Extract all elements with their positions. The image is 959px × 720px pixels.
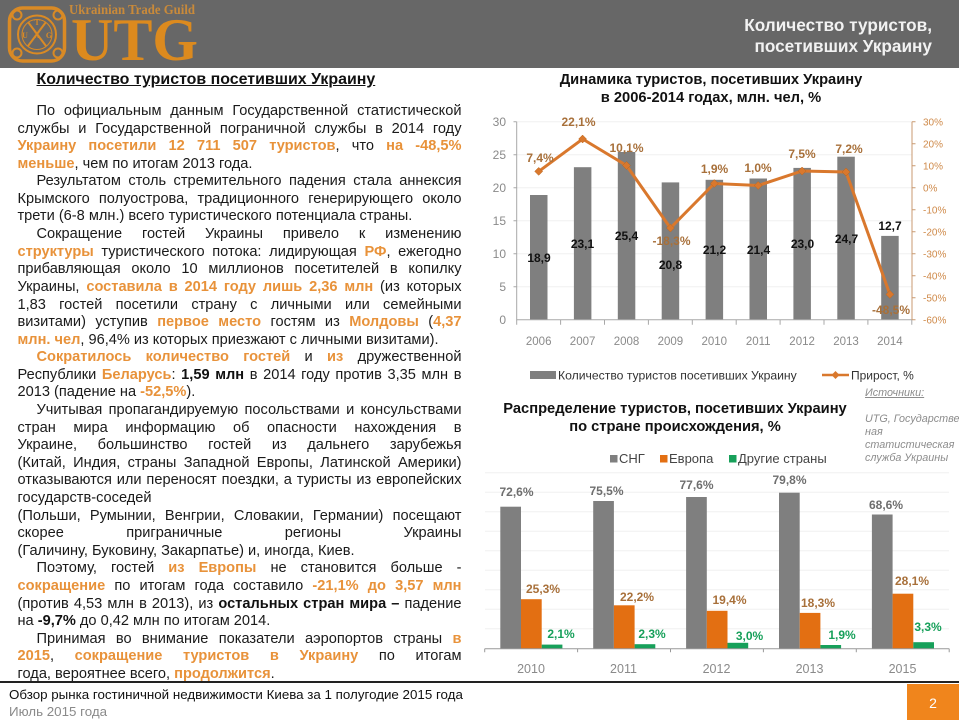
legend: СНГ <box>619 451 645 466</box>
text: службы и Государственной пограничной службы в 2014 году <box>18 120 462 136</box>
bar data labels: 23,0 <box>791 237 815 251</box>
right axis labels: 10% <box>923 162 943 172</box>
text: Учитывая пропагандируемую посольствами и консульствами <box>36 402 462 418</box>
text: отказываются или переносят поездки, а туристы из европейских <box>18 472 462 488</box>
text: меньше, чем по итогам 2013 года. <box>18 156 252 172</box>
header title: Количество туристов, <box>744 15 932 35</box>
header title: посетивших Украину <box>754 36 932 56</box>
line: growth percent <box>535 135 894 298</box>
x axis labels: 2011 <box>746 336 771 348</box>
text: скорее приграничные регионы Украины <box>18 525 462 541</box>
legend: Другие страны <box>738 451 827 466</box>
text: Украине, большинство гостей из дальнего зарубежья <box>18 437 462 453</box>
text block: danger warnings <box>18 402 462 559</box>
text: Украину посетили 12 711 507 туристов, что на -48,5% <box>18 138 462 154</box>
x axis labels: 2009 <box>658 336 683 348</box>
bars: other countries <box>542 642 934 649</box>
text: трети (6-8 млн.) всего туристического потенциала страны. <box>18 208 412 224</box>
x axis labels: 2013 <box>833 336 859 348</box>
text: Сокращение гостей Украины привело к изменению <box>36 226 462 242</box>
growth data labels: -18,3% <box>652 234 691 248</box>
axis <box>485 649 949 652</box>
growth data labels <box>526 115 910 317</box>
chart legend: Количество туристов посетивших Украину <box>558 368 798 382</box>
sources note: ная <box>865 426 883 438</box>
x axis labels: 2014 <box>877 336 903 348</box>
text: структуры туристического потока: лидирующая РФ, ежегодно <box>18 244 462 260</box>
right axis labels: -50% <box>923 294 946 304</box>
header band <box>0 0 959 68</box>
chart 1 title: Динамика туристов, посетивших Украину <box>560 72 862 88</box>
growth data labels: 10,1% <box>609 141 644 155</box>
sources note: служба Украины <box>865 452 948 464</box>
data labels: Europe <box>526 574 929 610</box>
chart 1 title <box>560 72 862 106</box>
data labels: Europe: 25,3% <box>526 582 560 596</box>
right axis labels: 30% <box>923 118 943 128</box>
data labels: other: 2,3% <box>638 627 666 641</box>
text: года, вероятнее всего, продолжится. <box>18 666 275 682</box>
icon: UTG logo: X <box>34 31 40 40</box>
bar data labels: 23,1 <box>571 237 595 251</box>
text: стран мира информацию об опасности нахождения в <box>18 420 462 436</box>
left axis labels: 15 <box>493 214 506 228</box>
x axis labels: 2013 <box>796 662 823 676</box>
text: на -9,7% до 0,42 млн по итогам 2014. <box>18 613 270 629</box>
footer text: Обзор рынка гостиничной недвижимости Киева за 1 полугодие 2015 года <box>9 687 463 702</box>
text: (Китай, Индия, страны Западной Европы, Латинской Америки) <box>18 455 462 471</box>
right axis labels: -60% <box>923 316 946 326</box>
bars: Europe <box>521 594 913 649</box>
text: Поэтому, гостей из Европы не становится больше - <box>36 560 462 576</box>
text: Украины, составила в 2014 году лишь 2,36 млн (из которых <box>18 279 462 295</box>
page number: 2 <box>929 695 937 711</box>
x axis labels: 2011 <box>610 662 637 676</box>
right axis labels: -30% <box>923 250 946 260</box>
x axis labels: 2012 <box>789 336 815 348</box>
header title <box>744 15 932 56</box>
bar data labels: 18,9 <box>527 251 551 265</box>
right axis labels: 0% <box>923 184 938 194</box>
sources note <box>865 387 959 464</box>
right axis labels: 20% <box>923 140 943 150</box>
data labels: CIS <box>499 473 903 512</box>
icon: UTG logo: Ukrainian Trade Guild <box>69 2 195 17</box>
x axis labels: 2012 <box>703 662 730 676</box>
left axis labels: 10 <box>493 247 506 261</box>
icon: UTG logo <box>8 2 198 68</box>
text: прибавляющая около 10 миллионов посетителей в копилку <box>18 261 462 277</box>
data labels: Europe: 22,2% <box>620 590 654 604</box>
text: 2015, сокращение туристов в Украину по итогам <box>18 648 462 664</box>
sources note: Источники: <box>865 387 924 399</box>
text: Принимая во внимание показатели аэропортов страны в <box>36 631 462 647</box>
text block: structure of tourist flow <box>18 226 462 348</box>
x axis labels: 2008 <box>614 336 639 348</box>
text: млн. чел, 96,4% из которых приезжают с личными визитами). <box>18 332 439 348</box>
text: 1,83 гостей посетили страну с личными или семейными <box>18 296 462 312</box>
left axis labels: 5 <box>499 280 506 294</box>
data labels: other: 2,1% <box>547 627 575 641</box>
bars: CIS <box>500 493 893 649</box>
icon: UTG logo: U <box>22 31 28 40</box>
text: сокращение по итогам года составило -21,1% до 3,57 млн <box>18 578 462 594</box>
data labels: CIS: 77,6% <box>679 478 714 492</box>
left axis labels: 0 <box>499 313 506 327</box>
data labels: CIS: 72,6% <box>499 485 534 499</box>
text: (Галичину, Буковину, Закарпатье) и, иногда, Киев. <box>18 543 355 559</box>
data labels: Europe: 19,4% <box>712 593 747 607</box>
growth data labels: 7,5% <box>788 147 816 161</box>
text: Сократилось количество гостей и из дружественной <box>36 349 462 365</box>
x axis labels <box>526 336 903 348</box>
text: Республики Беларусь: 1,59 млн в 2014 году против 3,35 млн в <box>18 367 461 383</box>
data labels: other: 1,9% <box>828 628 856 642</box>
bar data labels: 24,7 <box>835 232 859 246</box>
text: государств-соседей <box>18 490 152 506</box>
left axis labels <box>493 115 506 327</box>
right axis labels: -20% <box>923 228 946 238</box>
page number <box>907 684 959 720</box>
x axis labels: 2015 <box>889 662 916 676</box>
growth data labels: 7,4% <box>526 151 554 165</box>
footer text <box>9 687 463 719</box>
bars: tourist count <box>530 152 899 320</box>
left axis labels: 30 <box>493 115 506 129</box>
data labels: CIS: 68,6% <box>869 498 903 512</box>
icon: UTG logo: G <box>46 31 52 40</box>
text block: annexation <box>18 173 462 224</box>
footer text: Июль 2015 года <box>9 704 107 719</box>
data labels: other <box>547 620 942 643</box>
text block: 2015 outlook <box>18 631 462 682</box>
data labels: other: 3,0% <box>736 629 764 643</box>
text: визитами) уступив первое место гостям из Молдовы (4,37 <box>18 314 462 330</box>
chart legend: Прирост, % <box>851 368 914 382</box>
chart 2 title: Распределение туристов, посетивших Украину <box>503 401 847 417</box>
legend: Европа <box>669 451 714 466</box>
text: Крымского полуострова, традиционного генерирующего около <box>18 191 462 207</box>
bar data labels <box>527 219 902 272</box>
growth data labels: -48,5% <box>872 303 910 317</box>
bar data labels: 25,4 <box>615 229 639 243</box>
sources note: статистическая <box>865 439 954 451</box>
text: (Польши, Румынии, Венгрии, Словакии, Германии) посещают <box>18 508 462 524</box>
x axis labels <box>517 662 916 676</box>
right axis labels: -10% <box>923 206 946 216</box>
x axis labels: 2010 <box>517 662 545 676</box>
combo chart: tourists and growth <box>493 115 946 382</box>
data labels: other: 3,3% <box>914 620 942 634</box>
chart 2 title: по стране происхождения, % <box>569 419 781 435</box>
bar data labels: 21,4 <box>747 243 771 257</box>
text: По официальным данным Государственной статистической <box>36 103 462 119</box>
bar data labels: 21,2 <box>703 243 727 257</box>
chart 2 title <box>503 401 847 435</box>
growth data labels: 22,1% <box>561 115 596 129</box>
bar data labels: 12,7 <box>878 219 902 233</box>
chart legend <box>530 368 914 382</box>
x axis labels: 2006 <box>526 336 551 348</box>
data labels: Europe: 28,1% <box>895 574 929 588</box>
data labels: Europe: 18,3% <box>801 596 835 610</box>
data labels: CIS: 79,8% <box>772 473 807 487</box>
growth data labels: 1,0% <box>744 161 772 175</box>
growth data labels: 1,9% <box>701 162 729 176</box>
left axis labels: 25 <box>493 148 506 162</box>
text: (против 4,53 млн в 2013), из остальных стран мира – падение <box>18 596 461 612</box>
x axis labels: 2007 <box>570 336 595 348</box>
bar data labels: 20,8 <box>659 258 683 272</box>
right axis labels <box>923 118 946 326</box>
legend <box>610 451 827 466</box>
text: Результатом столь стремительного падения стала аннексия <box>36 173 462 189</box>
text block: Belarus <box>18 349 462 400</box>
text block: Europe decline <box>18 560 462 629</box>
left column heading: Количество туристов посетивших Украину <box>36 71 375 88</box>
chart 1 title: в 2006-2014 годах, млн. чел, % <box>601 90 821 106</box>
footer rule <box>0 681 959 683</box>
axes <box>514 122 912 325</box>
growth data labels: 7,2% <box>835 142 863 156</box>
data labels: CIS: 75,5% <box>589 484 624 498</box>
left axis labels: 20 <box>493 181 506 195</box>
text block: official statistics <box>18 103 462 172</box>
x axis labels: 2010 <box>702 336 727 348</box>
icon: UTG logo: T <box>34 18 40 27</box>
text: 2013 (падение на -52,5%). <box>18 384 195 400</box>
right axis labels: -40% <box>923 272 946 282</box>
